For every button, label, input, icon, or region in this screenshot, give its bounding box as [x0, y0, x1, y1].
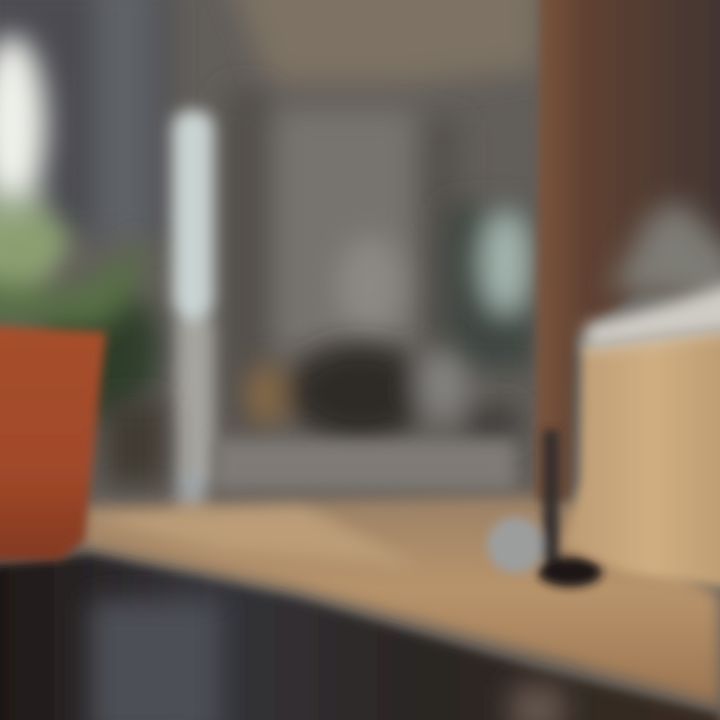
sofa and furniture	[247, 344, 520, 440]
dark area behind plant	[105, 400, 165, 485]
back wall panel	[225, 90, 460, 430]
wood floor	[80, 495, 720, 705]
cream box	[565, 325, 720, 590]
ceiling	[225, 0, 540, 85]
terracotta pot	[0, 325, 106, 560]
curtain	[535, 0, 720, 500]
white cloth on box	[585, 280, 720, 350]
plant leaves	[0, 215, 160, 420]
central window strip	[172, 110, 214, 530]
left window	[0, 35, 46, 270]
left wall	[0, 0, 170, 240]
dark table foreground	[0, 555, 720, 720]
curtain haze	[610, 200, 720, 310]
rug	[215, 440, 515, 490]
lamp glow	[336, 235, 404, 335]
far doorway and window	[445, 205, 535, 370]
stand pole and foot	[487, 430, 602, 587]
table reflections	[90, 600, 565, 720]
